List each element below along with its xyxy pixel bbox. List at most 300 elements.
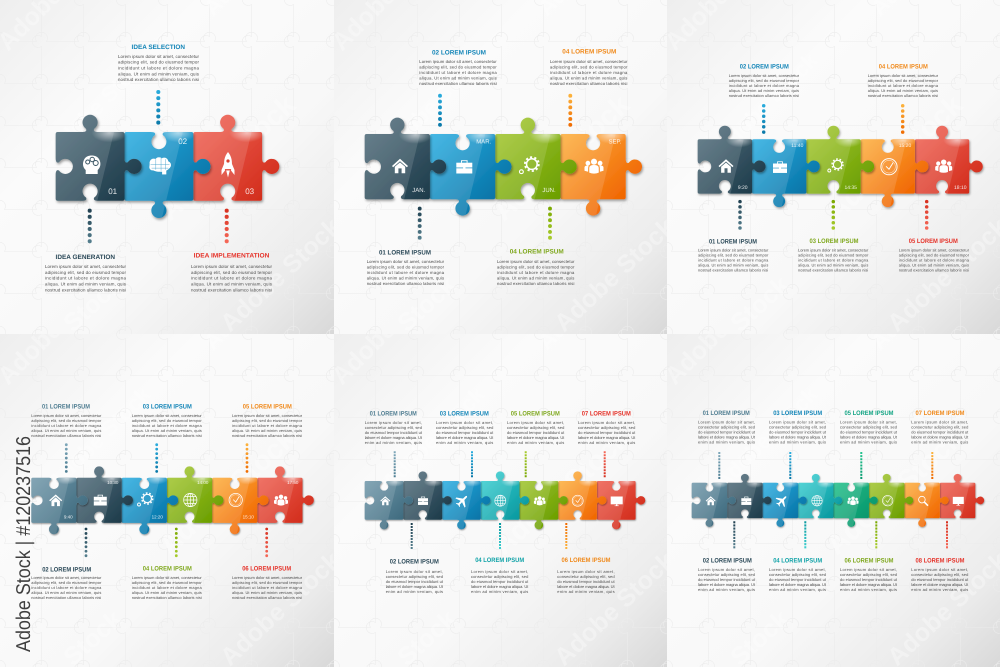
panel: five-piece puzzle: [659, 0, 1000, 337]
text block 06: adipiscing elit, sed do eiusmod tempor: [232, 580, 303, 585]
dotted connector 04 top: [568, 94, 572, 127]
heading 05: 05 LOREM IPSUM: [511, 410, 560, 417]
text block 02: aliqua. Ut enim ad minim veniam, quis: [729, 88, 799, 93]
heading 05: 05 LOREM IPSUM: [243, 403, 292, 410]
heading 04 bottom: 04 LOREM IPSUM: [510, 248, 564, 255]
time 15:20: 15:20: [899, 143, 911, 149]
text block 04: consectetur adipiscing elit, sed: [471, 574, 528, 579]
time 14:35: 14:35: [844, 185, 857, 191]
text block 05: aliqua. Ut enim ad minim veniam, quis: [899, 262, 969, 268]
puzzle piece 4: teal: [787, 472, 842, 531]
dotted connector 03: [789, 452, 791, 479]
text block 07: enim ad minim veniam, quis: [578, 440, 635, 445]
text block: idea implementation: incididunt ut labore et dolore magna: [191, 276, 273, 281]
text block 07: enim ad minim veniam, quis: [911, 440, 968, 444]
text block 04: aliqua. Ut enim ad minim veniam, quis: [868, 88, 938, 93]
dotted connector 05: [860, 452, 862, 479]
heading 02: 02 LOREM IPSUM: [432, 50, 486, 57]
puzzle piece 1: slate blue: [18, 464, 88, 539]
icon: rocket: [222, 152, 234, 178]
dotted connector 06: [875, 521, 877, 548]
text block 02: [31, 575, 102, 600]
text block 06: do eiusmod tempor incididunt ut: [840, 577, 898, 582]
text block 04: Lorem ipsum dolor sit amet,: [769, 567, 826, 572]
heading 04: 04 LOREM IPSUM: [143, 565, 192, 572]
dotted connector 02: [438, 94, 442, 127]
dotted connector: idea implementation: [225, 209, 229, 243]
icon: globe: [184, 493, 197, 507]
panel 2 background: [334, 0, 667, 334]
text block 02: adipiscing elit, sed do eiusmod tempor: [419, 64, 497, 70]
text block 04 top: [550, 59, 628, 86]
text block 01: do eiusmod tempor incididunt ut: [365, 430, 423, 435]
text block 02: incididunt ut labore et dolore magna: [419, 70, 497, 75]
time 15:10: 15:10: [243, 514, 254, 519]
text block 03: [132, 413, 203, 438]
dotted connector 01: [418, 207, 422, 240]
icon: globe: [812, 495, 822, 506]
text block 02: consectetur adipiscing elit, sed: [698, 572, 755, 577]
dotted connector 03: [832, 200, 835, 230]
panel 5 background: [334, 334, 667, 667]
text block 07: do eiusmod tempor incididunt ut: [578, 430, 636, 435]
text block 08: enim ad minim veniam, quis: [911, 587, 968, 592]
dotted connector 02: [85, 528, 87, 557]
dotted connector 02: [733, 521, 735, 548]
text block 04: enim ad minim veniam, quis: [769, 587, 826, 592]
dotted connector 04: [175, 528, 178, 557]
text block 05: labore et dolore magna aliqua. Ut: [840, 434, 898, 440]
icon: clock: [229, 493, 242, 507]
text block 08: [911, 567, 969, 592]
text block 01: adipiscing elit, sed do eiusmod tempor: [31, 418, 102, 423]
heading 02: 02 LOREM IPSUM: [703, 558, 752, 565]
puzzle piece 1: dark slate: [35, 111, 142, 225]
puzzle piece 3: blue: [108, 464, 178, 539]
puzzle piece 4: green: [153, 464, 223, 539]
text block 01: nostrud exercitation ullamco laboris nisi: [367, 281, 444, 286]
icon: home: [718, 159, 734, 173]
text block 02: Lorem ipsum dolor sit amet, consectetur: [419, 59, 497, 64]
icon: brain: [149, 157, 171, 174]
text block 04: nostrud exercitation ullamco laboris nisi: [868, 93, 938, 98]
text block 03: enim ad minim veniam, quis: [769, 440, 826, 444]
text block 05: nostrud exercitation ullamco laboris nisi: [232, 433, 302, 438]
text block 08: Lorem ipsum dolor sit amet,: [911, 567, 968, 572]
text block 08: labore et dolore magna aliqua. Ut: [911, 582, 969, 587]
text block 07: do eiusmod tempor incididunt ut: [911, 430, 969, 434]
text block 03: adipiscing elit, sed do eiusmod tempor: [132, 418, 202, 423]
puzzle piece 3: blue: [752, 472, 807, 531]
time 11:40: 11:40: [791, 143, 804, 149]
text block 05: nostrud exercitation ullamco laboris nisi: [899, 268, 969, 272]
heading 05: 05 LOREM IPSUM: [909, 238, 958, 245]
text block 05: Lorem ipsum dolor sit amet,: [507, 420, 564, 425]
puzzle piece 2: dark slate: [63, 464, 133, 539]
text block: idea generation: incididunt ut labore et dolore magna: [45, 276, 127, 281]
time 10:30: 10:30: [107, 480, 119, 485]
text block 04: Lorem ipsum dolor sit amet,: [471, 569, 528, 574]
dotted connector 04: [499, 523, 501, 549]
icon: gears: [520, 157, 539, 174]
text block 04 bottom: adipiscing elit, sed do eiusmod tempor: [497, 264, 575, 270]
text block 04: [769, 567, 827, 592]
puzzle piece 5: red: [899, 123, 983, 213]
text block 03: nostrud exercitation ullamco laboris nisi: [798, 268, 868, 272]
text block: idea implementation: [191, 264, 273, 292]
heading 04: 04 LOREM IPSUM: [773, 558, 822, 565]
text block 06: [557, 569, 615, 594]
text block 03: labore et dolore magna aliqua. Ut: [769, 434, 827, 440]
text block: idea selection: aliqua. Ut enim ad minim veniam, quis: [118, 71, 200, 76]
label JAN.: JAN.: [412, 187, 426, 194]
text block 05: adipiscing elit, sed do eiusmod tempor: [899, 252, 970, 258]
heading 01: 01 LOREM IPSUM: [709, 239, 757, 246]
icon: gears: [828, 159, 843, 172]
icon: clock: [882, 495, 893, 506]
text block 04 bottom: nostrud exercitation ullamco laboris nisi: [497, 281, 574, 286]
text block 02: consectetur adipiscing elit, sed: [386, 574, 443, 579]
text block 07: [911, 420, 969, 444]
puzzle piece 3: blue: [430, 469, 490, 533]
dotted connector 03: [471, 451, 473, 477]
text block 04 top: aliqua. Ut enim ad minim veniam, quis: [550, 76, 627, 80]
text block 01: do eiusmod tempor incididunt ut: [698, 430, 756, 434]
puzzle piece 3: green: [790, 123, 874, 213]
puzzle piece 3: red: [173, 111, 279, 225]
text block 02: labore et dolore magna aliqua. Ut: [386, 584, 444, 589]
heading 08: 08 LOREM IPSUM: [916, 558, 964, 565]
text block 02: do eiusmod tempor incididunt ut: [698, 577, 756, 582]
text block 06: Lorem ipsum dolor sit amet,: [557, 569, 615, 574]
text block 02: enim ad minim veniam, quis: [386, 589, 443, 594]
icon: magnifier: [919, 496, 928, 506]
puzzle piece 6: red: [244, 464, 314, 539]
icon: gears: [138, 493, 153, 506]
dotted connector 04: [804, 521, 806, 548]
panel 3 background: [667, 0, 1000, 334]
panel: eight-piece puzzle: [659, 288, 1000, 667]
text block 04: enim ad minim veniam, quis: [471, 589, 528, 594]
text block 04: nostrud exercitation ullamco laboris nisi: [132, 595, 202, 600]
text block 06: Lorem ipsum dolor sit amet,: [840, 567, 897, 572]
text block 06: [232, 575, 303, 600]
text block 03: consectetur adipiscing elit, sed: [769, 424, 826, 430]
text block 03: [769, 420, 827, 444]
icon: clock: [881, 159, 897, 175]
heading 01: 01 LOREM IPSUM: [42, 403, 90, 410]
panel 6 background: [667, 334, 1000, 667]
text block 01: [365, 420, 423, 445]
puzzle piece 2: blue: [410, 114, 512, 222]
label MAR.: MAR.: [476, 139, 492, 146]
text block 04 bottom: incididunt ut labore et dolore magna: [497, 270, 575, 275]
heading 06: 06 LOREM IPSUM: [562, 557, 610, 564]
puzzle piece 1: slate blue: [353, 469, 413, 533]
text block 06: nostrud exercitation ullamco laboris nisi: [232, 595, 302, 600]
heading 03: 03 LOREM IPSUM: [143, 403, 192, 410]
dotted connector 06: [565, 523, 567, 549]
text block 02: incididunt ut labore et dolore magna: [31, 585, 102, 590]
icon: clock: [572, 495, 583, 506]
text block 03: incididunt ut labore et dolore magna: [132, 423, 203, 428]
text block: idea generation: nostrud exercitation ullamco laboris nisi: [45, 287, 126, 292]
text block 03: Lorem ipsum dolor sit amet,: [769, 420, 826, 424]
text block 05: do eiusmod tempor incididunt ut: [507, 430, 565, 435]
dotted connector 04: [901, 104, 904, 134]
text block 01: Lorem ipsum dolor sit amet, consectetur: [698, 248, 769, 252]
heading 06: 06 LOREM IPSUM: [242, 565, 291, 572]
text block 03: [798, 248, 869, 272]
heading 04: 04 LOREM IPSUM: [475, 557, 524, 564]
puzzle piece 5: green: [508, 469, 568, 533]
text block 03: do eiusmod tempor incididunt ut: [436, 430, 494, 435]
text block 02: [729, 73, 800, 98]
text block 05: aliqua. Ut enim ad minim veniam, quis: [232, 428, 302, 433]
text block 08: do eiusmod tempor incididunt ut: [911, 577, 969, 582]
puzzle piece 6: orange: [547, 469, 607, 533]
time 12:20: 12:20: [152, 514, 163, 519]
text block 05: consectetur adipiscing elit, sed: [840, 424, 897, 430]
puzzle piece 2: dark slate: [717, 472, 771, 531]
text block 05: enim ad minim veniam, quis: [507, 440, 564, 445]
text block 03: consectetur adipiscing elit, sed: [436, 425, 493, 430]
panel 1 background: [0, 0, 334, 334]
text block 08: consectetur adipiscing elit, sed: [911, 572, 968, 577]
text block 01: enim ad minim veniam, quis: [698, 440, 755, 444]
text block 01: Lorem ipsum dolor sit amet, consectetur: [367, 259, 445, 264]
number 03: 03: [245, 187, 255, 196]
text block 04 bottom: Lorem ipsum dolor sit amet, consectetur: [497, 259, 575, 264]
dotted connector 01: [738, 200, 742, 230]
icon: briefcase: [773, 162, 787, 173]
icon: airplane: [453, 492, 471, 510]
text block 07: labore et dolore magna aliqua. Ut: [578, 435, 636, 440]
puzzle piece 4: teal: [469, 469, 529, 533]
text block 04: labore et dolore magna aliqua. Ut: [769, 582, 827, 587]
heading 02: 02 LOREM IPSUM: [390, 558, 439, 565]
icon: briefcase: [418, 497, 428, 505]
icon: people: [935, 159, 952, 173]
text block: idea selection: incididunt ut labore et dolore magna: [118, 65, 200, 70]
text block 04: labore et dolore magna aliqua. Ut: [471, 584, 529, 589]
text block 04 top: incididunt ut labore et dolore magna: [550, 70, 628, 75]
dotted connector: idea selection: [156, 90, 160, 125]
text block 01: incididunt ut labore et dolore magna: [698, 258, 769, 262]
text block 04: incididunt ut labore et dolore magna: [132, 585, 203, 590]
text block 07: [578, 420, 636, 445]
text block 05: [507, 420, 565, 445]
label SEP.: SEP.: [609, 139, 622, 146]
text block 07: consectetur adipiscing elit, sed: [578, 425, 635, 430]
text block 02: labore et dolore magna aliqua. Ut: [698, 582, 756, 587]
text block 04: adipiscing elit, sed do eiusmod tempor: [868, 78, 939, 83]
text block 04: Lorem ipsum dolor sit amet, consectetur: [132, 575, 202, 580]
heading 01: 01 LOREM IPSUM: [370, 410, 417, 417]
dotted connector 03: [155, 443, 158, 473]
number 01: 01: [108, 187, 118, 196]
text block 05: [840, 420, 898, 444]
text block 01: labore et dolore magna aliqua. Ut: [365, 435, 423, 440]
text block 01: aliqua. Ut enim ad minim veniam, quis: [698, 262, 768, 268]
panel: six-piece puzzle: [0, 288, 346, 667]
panel: seven-piece puzzle: [326, 288, 680, 667]
heading 02: 02 LOREM IPSUM: [740, 64, 789, 71]
puzzle piece 5: emerald: [823, 472, 878, 531]
dotted connector 01: [718, 452, 720, 479]
icon: people: [584, 159, 604, 174]
text block 06: do eiusmod tempor incididunt ut: [557, 579, 615, 584]
text block 03: [436, 420, 494, 445]
text block 07: labore et dolore magna aliqua. Ut: [911, 434, 969, 440]
text block 05: labore et dolore magna aliqua. Ut: [507, 435, 565, 440]
text block 06: incididunt ut labore et dolore magna: [232, 585, 303, 590]
text block: idea generation: [45, 264, 127, 292]
puzzle piece 2: blue: [736, 123, 820, 213]
text block 06: [840, 567, 898, 592]
time 9:20: 9:20: [738, 185, 748, 191]
text block 05: incididunt ut labore et dolore magna: [232, 423, 303, 428]
icon: monitor: [953, 497, 964, 506]
text block 04: [471, 569, 529, 594]
text block 03: Lorem ipsum dolor sit amet, consectetur: [798, 248, 869, 252]
dotted connector 06: [265, 528, 268, 557]
dotted connector 07: [604, 451, 606, 477]
text block 02: incididunt ut labore et dolore magna: [729, 83, 800, 88]
icon: briefcase: [456, 161, 472, 174]
text block 06: aliqua. Ut enim ad minim veniam, quis: [232, 590, 302, 595]
text block 07: consectetur adipiscing elit, sed: [911, 424, 968, 430]
time 17:50: 17:50: [287, 480, 299, 485]
text block 02: Lorem ipsum dolor sit amet,: [386, 569, 443, 574]
text block 01: nostrud exercitation ullamco laboris nisi: [698, 268, 768, 272]
text block 02: Lorem ipsum dolor sit amet,: [698, 567, 755, 572]
puzzle piece 2: dark slate: [392, 469, 452, 533]
text block: idea selection: [118, 54, 200, 82]
text block 04: aliqua. Ut enim ad minim veniam, quis: [132, 590, 202, 595]
text block 01: [698, 420, 756, 444]
panel: four-piece puzzle: [326, 0, 680, 337]
dotted connector 05: [925, 200, 928, 230]
text block: idea selection: nostrud exercitation ullamco laboris nisi: [118, 77, 199, 82]
text block 03: nostrud exercitation ullamco laboris nisi: [132, 433, 202, 438]
text block 06: labore et dolore magna aliqua. Ut: [840, 582, 898, 587]
dotted connector 05: [525, 451, 527, 477]
text block 04 bottom: aliqua. Ut enim ad minim veniam, quis: [497, 276, 574, 280]
puzzle piece 4: orange: [541, 114, 642, 222]
text block 02: [698, 567, 756, 592]
text block 01: adipiscing elit, sed do eiusmod tempor: [698, 252, 769, 258]
text block 02: adipiscing elit, sed do eiusmod tempor: [729, 78, 800, 83]
dotted connector 05: [246, 443, 248, 473]
time 18:10: 18:10: [954, 185, 967, 191]
dotted connector 04 bottom: [548, 207, 552, 240]
text block: idea implementation: nostrud exercitation ullamco laboris nisi: [191, 287, 272, 292]
puzzle piece 2: blue: [104, 111, 211, 225]
number 02: 02: [178, 137, 188, 146]
text block 04 top: Lorem ipsum dolor sit amet, consectetur: [550, 59, 628, 64]
puzzle piece 1: slate blue: [681, 472, 736, 531]
time 14:00: 14:00: [197, 480, 209, 485]
text block: idea implementation: adipiscing elit, sed do eiusmod tempor: [191, 270, 273, 275]
heading 07: 07 LOREM IPSUM: [582, 410, 631, 417]
icon: people: [848, 496, 858, 505]
icon: monitor: [611, 496, 623, 506]
text block 05: consectetur adipiscing elit, sed: [507, 425, 564, 430]
text block 04: do eiusmod tempor incididunt ut: [769, 577, 827, 582]
text block 02: nostrud exercitation ullamco laboris nisi: [729, 93, 799, 98]
text block 04 bottom: [497, 259, 575, 286]
text block 01: [31, 413, 102, 438]
icon: head with gears: [83, 156, 100, 174]
text block 01: aliqua. Ut enim ad minim veniam, quis: [31, 428, 101, 433]
text block 02: nostrud exercitation ullamco laboris nisi: [31, 595, 101, 600]
puzzle piece 5: orange: [199, 464, 269, 539]
text block 06: enim ad minim veniam, quis: [557, 589, 615, 594]
text block 04 top: adipiscing elit, sed do eiusmod tempor: [550, 64, 628, 70]
dotted connector 08: [946, 521, 948, 548]
text block 01: enim ad minim veniam, quis: [365, 440, 422, 445]
panel: three-piece puzzle: [0, 0, 346, 337]
text block 01: Lorem ipsum dolor sit amet,: [365, 420, 422, 425]
text block 05: [899, 248, 970, 272]
text block 05: Lorem ipsum dolor sit amet, consectetur: [232, 413, 303, 418]
text block 02: nostrud exercitation ullamco laboris nisi: [419, 81, 497, 86]
text block 04: [868, 73, 939, 98]
text block 02: [419, 59, 497, 86]
text block 04: [132, 575, 203, 600]
text block 04 top: nostrud exercitation ullamco laboris nisi: [550, 81, 627, 86]
text block: idea selection: Lorem ipsum dolor sit amet, consectetur: [118, 54, 200, 59]
text block 02: adipiscing elit, sed do eiusmod tempor: [31, 580, 102, 585]
icon: globe: [495, 495, 506, 506]
text block 02: enim ad minim veniam, quis: [698, 587, 755, 592]
text block 01: consectetur adipiscing elit, sed: [698, 424, 755, 430]
text block 01: incididunt ut labore et dolore magna: [31, 423, 102, 428]
heading 02: 02 LOREM IPSUM: [42, 566, 91, 573]
heading 01: 01 LOREM IPSUM: [703, 410, 750, 417]
text block 05: incididunt ut labore et dolore magna: [899, 258, 970, 262]
text block 03: enim ad minim veniam, quis: [436, 440, 493, 445]
text block 04: do eiusmod tempor incididunt ut: [471, 579, 529, 584]
time 9:40: 9:40: [64, 514, 73, 519]
icon: briefcase: [741, 497, 751, 505]
text block 01: nostrud exercitation ullamco laboris nisi: [31, 433, 101, 438]
text block 06: enim ad minim veniam, quis: [840, 587, 897, 592]
icon: home: [49, 494, 62, 506]
puzzle piece 6: green: [858, 472, 913, 531]
dotted connector: idea generation: [88, 209, 92, 243]
text block 05: enim ad minim veniam, quis: [840, 440, 897, 444]
text block 05: [232, 413, 303, 438]
heading 05: 05 LOREM IPSUM: [844, 410, 894, 417]
text block 07: Lorem ipsum dolor sit amet,: [911, 420, 968, 424]
heading: idea generation: IDEA GENERATION: [56, 254, 115, 261]
icon: home: [380, 496, 390, 505]
text block 01: [367, 259, 445, 286]
puzzle piece 1: dark slate: [345, 114, 446, 222]
text block 01: [698, 248, 769, 272]
text block 05: Lorem ipsum dolor sit amet, consectetur: [899, 248, 970, 252]
icon: people: [274, 495, 288, 506]
heading: idea implementation: IDEA IMPLEMENTATION: [194, 253, 270, 260]
puzzle piece 4: orange: [844, 123, 928, 213]
text block 03: aliqua. Ut enim ad minim veniam, quis: [798, 262, 868, 268]
icon: home: [706, 496, 716, 505]
heading 04: 04 LOREM IPSUM: [879, 64, 928, 71]
text block 05: adipiscing elit, sed do eiusmod tempor: [232, 418, 303, 423]
dotted connector 02: [411, 523, 413, 549]
